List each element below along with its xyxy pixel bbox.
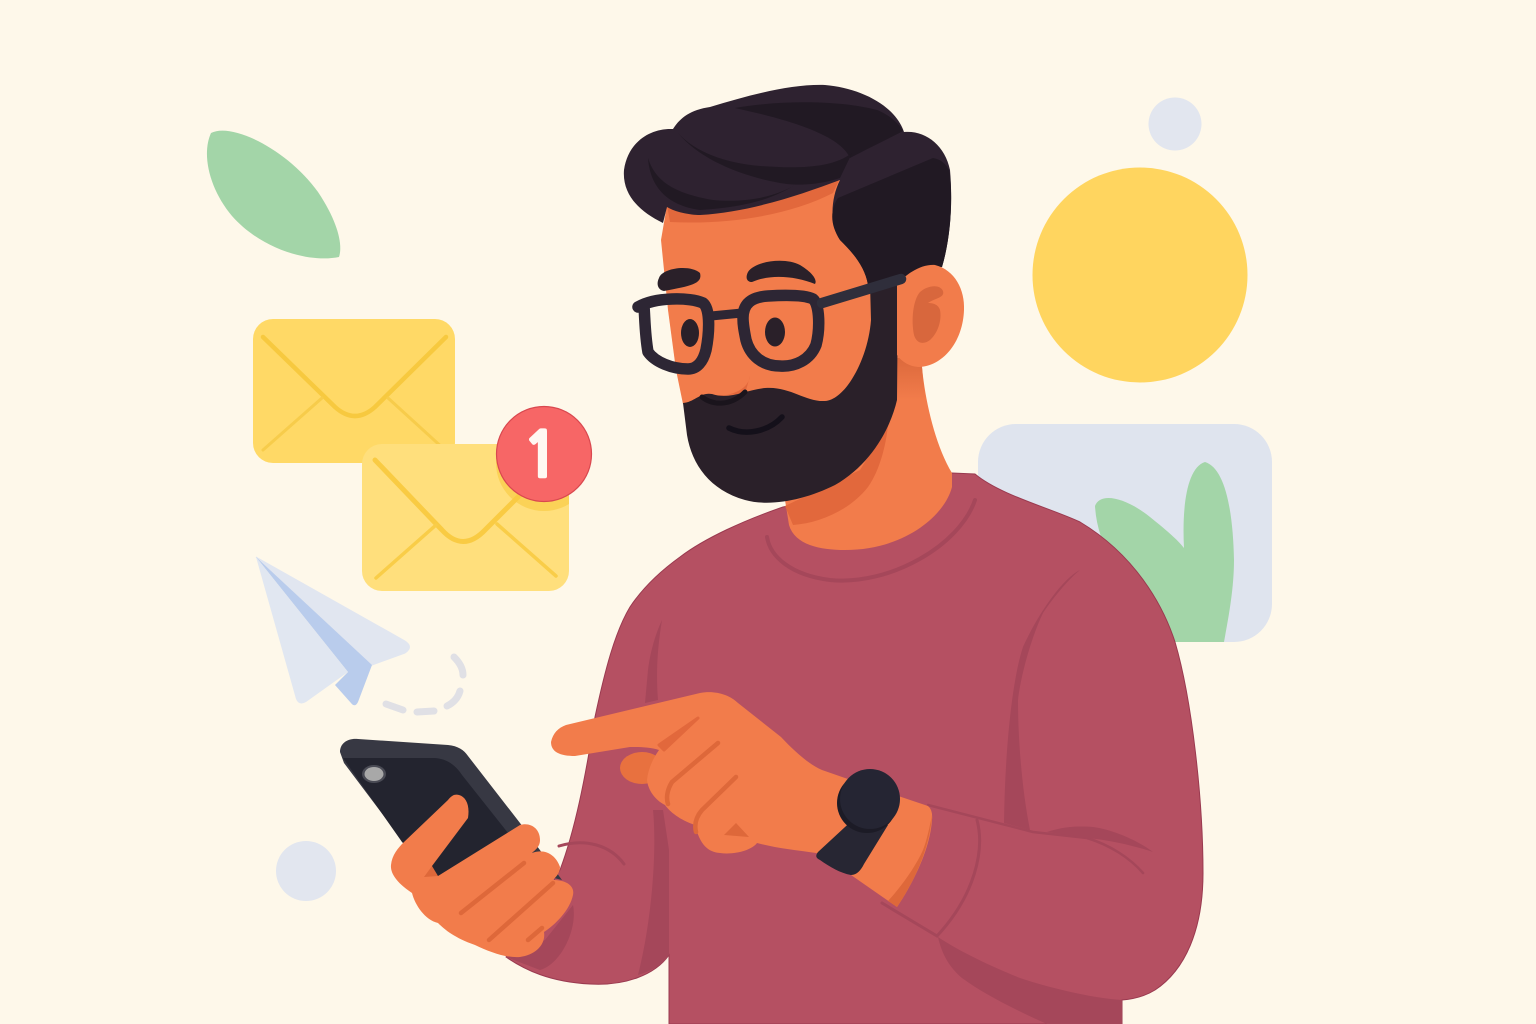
plane right wing: [256, 557, 410, 665]
illustration: [206, 84, 1272, 1024]
sweater shaded folds: [506, 570, 1153, 1024]
neck: [785, 340, 952, 550]
curled finger: [620, 752, 664, 784]
smartwatch: [816, 769, 900, 875]
icon: green leaf: [207, 131, 340, 258]
decorative small circle top right: [1148, 98, 1202, 150]
left cuff shadow: [506, 905, 574, 970]
plane fold: [256, 557, 372, 705]
nose shadow: [705, 376, 750, 396]
left side crease: [638, 810, 669, 975]
left upper arm fold: [645, 620, 662, 703]
hair dark crown: [735, 102, 903, 158]
plane left wing: [256, 557, 348, 703]
phone: [340, 739, 562, 885]
neck shadow under ear: [897, 358, 926, 400]
shoulder seam fold: [1004, 570, 1080, 830]
neck shadow under beard: [785, 425, 888, 525]
ear: [897, 265, 964, 367]
eyes: [681, 318, 785, 347]
pointing hand: [551, 692, 870, 860]
sweater body: [506, 473, 1203, 1024]
forehead shadow: [667, 178, 840, 223]
icon: paper plane: [256, 557, 410, 705]
phone camera: [362, 765, 386, 783]
smile: [729, 417, 782, 432]
wrist: [845, 778, 932, 907]
notification badge: [496, 406, 592, 502]
icon: yellow envelope back: [253, 319, 455, 463]
notification badge: 1: [522, 426, 560, 487]
decorative yellow circle: [1032, 168, 1248, 382]
sweater fold lines: [559, 500, 1143, 936]
under forearm shadow: [938, 937, 1122, 1024]
glasses: [638, 279, 901, 369]
hair: [624, 85, 951, 285]
eyebrows: [658, 261, 816, 291]
hair stripes: [678, 133, 852, 185]
face: [661, 175, 895, 404]
beard: [683, 280, 898, 503]
decorative small circle bottom left: [276, 841, 336, 901]
icon: yellow envelope front: [362, 444, 569, 591]
dashed flight path: [386, 657, 463, 712]
hair dark side: [832, 158, 951, 285]
picture card with plant: [978, 424, 1272, 642]
holding hand: [391, 795, 573, 957]
moustache curl: [702, 392, 745, 403]
elbow crease: [1047, 827, 1153, 852]
